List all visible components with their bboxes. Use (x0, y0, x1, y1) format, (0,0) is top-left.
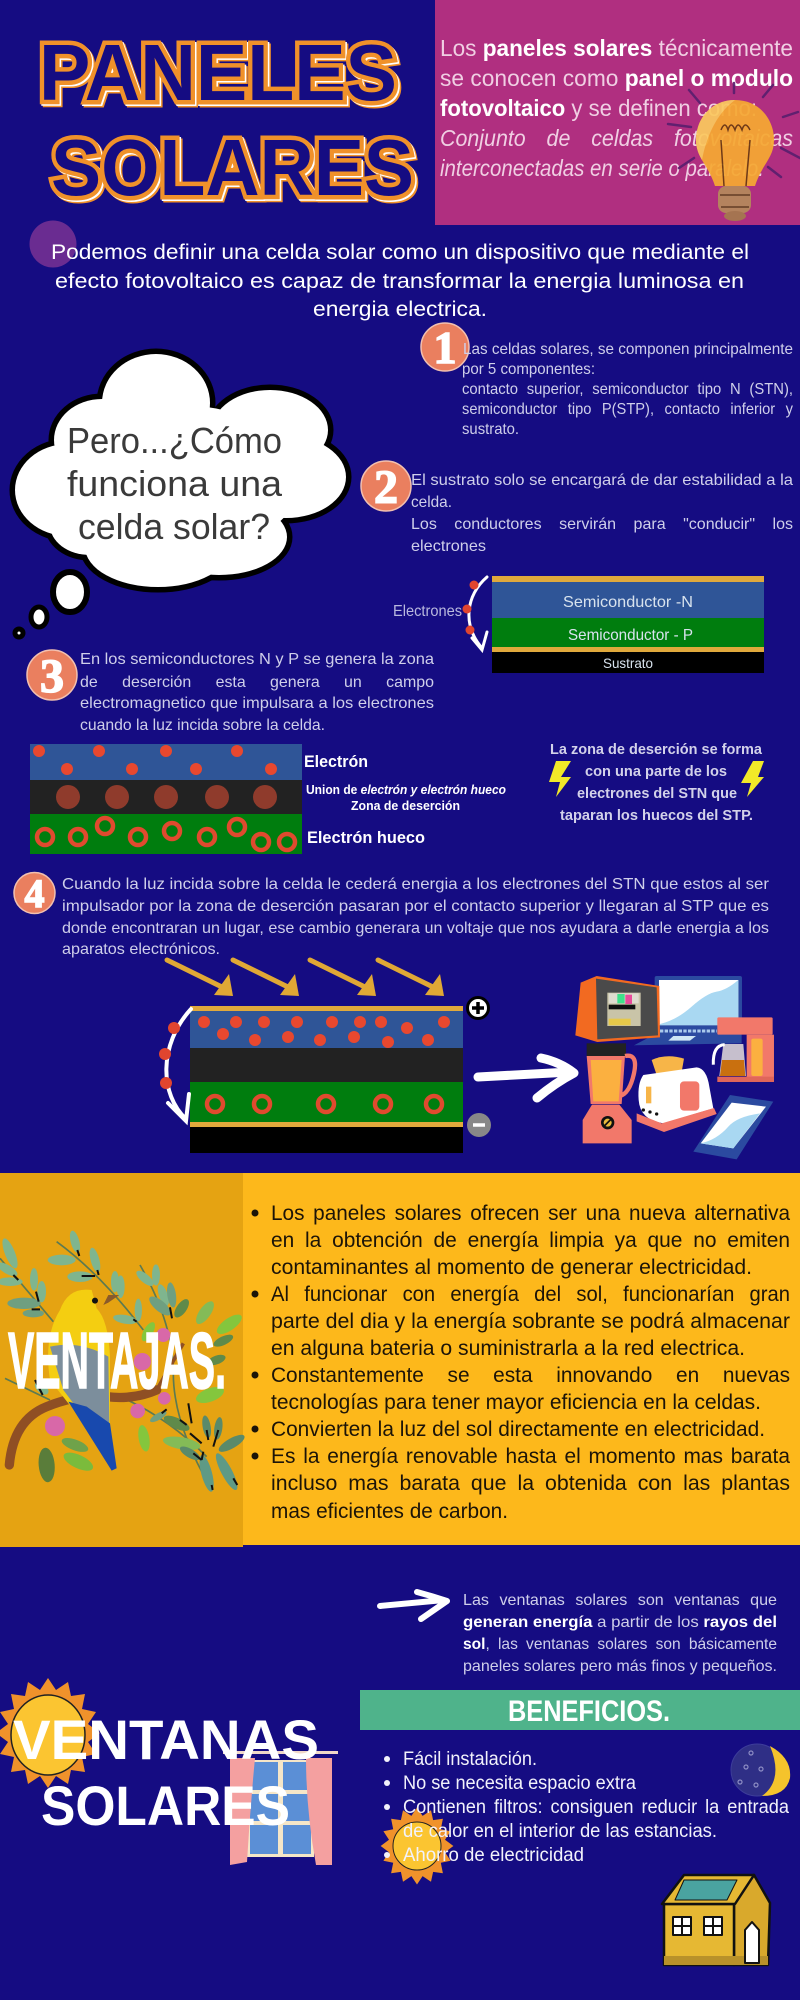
list: advantages: en la obtención de energía limpia ya que no emiten (271, 1229, 790, 1252)
title: Paneles Solares: PANELES (40, 30, 398, 118)
text: VENTAJAS. (8, 1316, 226, 1405)
step 3 text: En los semiconductores N y P se genera la zona (80, 651, 434, 668)
text: solar windows definition: Las ventanas solares son ventanas que (463, 1592, 777, 1609)
text: definition of solar panels: interconectadas en serie o paralelo. (440, 155, 764, 181)
list: benefits: de calor en el interior de las estancias. (403, 1821, 717, 1842)
heading: ventanas solares: SOLARES (41, 1774, 290, 1837)
step 3 text: electromagnetico que impulsara a los electrones (80, 695, 434, 712)
twigs (0, 1242, 210, 1487)
step 3 text: de deserción esta genera un campo (80, 674, 434, 691)
blender (583, 1043, 635, 1143)
title: Paneles Solares: SOLARES (52, 124, 416, 214)
list: advantages: Constantemente se esta innovando en nuevas (271, 1364, 790, 1387)
diagram: depletion zone (30, 744, 302, 854)
text: solar windows definition (463, 1592, 777, 1675)
diagram: cell layers: Semiconductor -N (563, 594, 693, 611)
step 1 badge: 1 (434, 322, 456, 373)
illustration: bird on branch (0, 1230, 247, 1493)
icon: house with solar panels (662, 1875, 770, 1965)
thought bubble: question: Pero...¿Cómo (67, 420, 282, 461)
step 4 badge (14, 871, 55, 916)
step 4 text (62, 876, 770, 958)
step 1 text: por 5 componentes: (462, 361, 595, 378)
icon: plus terminal (468, 998, 488, 1018)
list: benefits (384, 1749, 789, 1866)
list: advantages: Es la energía renovable hasta el momento mas barata (271, 1445, 790, 1468)
callout: depletion zone note: con una parte de los (585, 763, 727, 780)
labels: electron, union, hole: Union de electrón y electrón hueco (306, 782, 506, 797)
arrow: to window text (380, 1592, 447, 1619)
step 1 badge (421, 322, 469, 373)
step 3 text: cuando la luz incida sobre la celda. (80, 717, 325, 734)
title: Paneles Solares: PANELES (42, 31, 400, 120)
list: advantages: Convierten la luz del sol directamente en electricidad. (271, 1418, 765, 1441)
text: definition of solar panels: se conocen como panel o modulo (440, 65, 793, 91)
step 2 badge (361, 461, 411, 514)
heading: ventanas solares (13, 1708, 319, 1837)
text: definition of solar panels: Los paneles solares técnicamente (440, 35, 793, 61)
step 4 text: donde encontraran un lugar, ese cambio generara un voltaje que nos ayudara a darle energia a los (62, 920, 769, 937)
text: definition of solar panels (440, 35, 793, 181)
icon: moon (731, 1744, 790, 1796)
band: beneficios: BENEFICIOS. (508, 1695, 670, 1728)
arrow: electrons return (159, 1009, 191, 1121)
text: solar windows definition: generan energía a partir de los rayos del (463, 1614, 777, 1631)
list: advantages (252, 1202, 790, 1523)
illustration: window with curtains (223, 1751, 338, 1865)
title: Paneles Solares: SOLARES (54, 126, 417, 215)
title: Paneles Solares: PANELES (39, 28, 397, 117)
step 1 text (462, 341, 793, 438)
coffee maker (713, 1017, 774, 1082)
phone (693, 1095, 773, 1159)
icon: small sun (381, 1808, 453, 1884)
diagram: cell layers (492, 576, 764, 673)
text: definition of solar panels: fotovoltaico y se definen como: (440, 95, 757, 121)
arrows: sunlight (167, 960, 444, 996)
step 3 badge: 3 (40, 650, 64, 703)
labels: electron, union, hole (304, 752, 506, 847)
arrow: to appliances (478, 1058, 574, 1098)
leaves (0, 1230, 247, 1493)
callout: depletion zone note: electrones del STN que (577, 785, 737, 802)
callout: depletion zone note: La zona de deserción se forma (550, 741, 763, 758)
list: advantages: en alguna bateria o suministrarla a la red electrica. (271, 1337, 745, 1360)
icon: lightning right (741, 761, 764, 797)
icon: light bulb (668, 83, 800, 221)
list: benefits: Fácil instalación. (403, 1749, 537, 1770)
labels: electron, union, hole: Electrón hueco (307, 828, 425, 847)
step 2 text: Los conductores servirán para "conducir" los (411, 516, 793, 533)
labels: electron, union, hole: Electrón (304, 752, 368, 771)
thought bubble: question (15, 354, 346, 637)
panel: ventajas text background (243, 1173, 800, 1545)
step 4 text: Cuando la luz incida sobre la celda le cederá energia a los electrones del STN que estos al ser (62, 876, 770, 893)
title: Paneles Solares: SOLARES (51, 123, 414, 212)
step 4 badge: 4 (24, 871, 44, 916)
text: solar cell definition (51, 241, 749, 321)
band: beneficios (360, 1690, 800, 1730)
step 4 text: aparatos electrónicos. (62, 941, 220, 958)
step 2 text: El sustrato solo se encargará de dar estabilidad a la (411, 472, 793, 489)
label: electrones with arrow: Electrones (393, 603, 462, 620)
step 1 text: Las celdas solares, se componen principalmente (463, 341, 793, 358)
step 2 text: celda. (411, 494, 452, 511)
thought bubble: question: celda solar? (78, 506, 270, 547)
step 2 text (411, 472, 793, 555)
list: advantages: Al funcionar con energía del sol, funcionarían gran (271, 1283, 790, 1306)
icon: big sun (0, 1678, 100, 1788)
text: solar windows definition: paneles solares pero más finos y pequeños. (463, 1658, 777, 1675)
heading: ventanas solares: VENTANAS (13, 1708, 319, 1771)
flowers (45, 1328, 171, 1436)
callout: depletion zone note (550, 741, 763, 824)
list: advantages: contaminantes al momento de generar electricidad. (271, 1256, 752, 1279)
list: benefits: No se necesita espacio extra (403, 1773, 636, 1794)
toaster (637, 1056, 717, 1132)
bird (48, 1290, 110, 1423)
leaf marks (13, 1250, 237, 1490)
text: solar windows definition: sol, las ventanas solares son básicamente (463, 1636, 777, 1653)
panel: definition background (435, 0, 800, 225)
step 3 badge (27, 650, 77, 703)
illustration: electronic appliances (575, 976, 774, 1159)
panel: ventajas illustration (0, 1173, 243, 1547)
labels: electron, union, hole: Zona de deserción (351, 798, 460, 813)
list: advantages: tecnologías para tener mayor eficiencia en la celdas. (271, 1391, 761, 1414)
diagram: cell under light (190, 1006, 463, 1153)
list: benefits: Contienen filtros: consiguen reducir la entrada (403, 1797, 789, 1818)
diagram: cell layers: Sustrato (603, 655, 653, 671)
icon: minus terminal (467, 1113, 491, 1137)
decorative circle (30, 220, 76, 268)
list: advantages: incluso mas barata que la obtenida con las plantas (271, 1472, 790, 1495)
callout: depletion zone note: taparan los huecos del STP. (560, 807, 753, 824)
text: solar cell definition: Podemos definir una celda solar como un dispositivo que mediante el (51, 241, 749, 264)
list: advantages: Los paneles solares ofrecen ser una nueva alternativa (271, 1202, 790, 1225)
title: Paneles Solares (39, 28, 417, 215)
branch (9, 1390, 157, 1465)
list: benefits: Ahorro de electricidad (403, 1845, 584, 1866)
label: electrones with arrow (393, 577, 487, 650)
TV (575, 976, 660, 1042)
step 2 badge: 2 (374, 461, 398, 514)
text: solar cell definition: efecto fotovoltaico es capaz de transformar la energia luminosa en (55, 270, 744, 293)
step 4 text: impulsador por la zona de deserción pasaran por el contacto superior y llegaran al STP que es (62, 898, 769, 915)
diagram: cell layers: Semiconductor - P (568, 627, 693, 644)
step 2 text: electrones (411, 538, 486, 555)
list: advantages: mas eficientes de carbon. (271, 1500, 508, 1523)
step 1 text: sustrato. (462, 421, 519, 438)
list: advantages: parte del dia y la energía sobrante se podrá almacenar (271, 1310, 790, 1333)
thought bubble: question: funciona una (67, 463, 283, 504)
text: solar cell definition: energia electrica. (313, 298, 487, 321)
laptop (634, 976, 742, 1045)
icon: lightning left (549, 761, 571, 797)
step 3 text (80, 651, 434, 734)
